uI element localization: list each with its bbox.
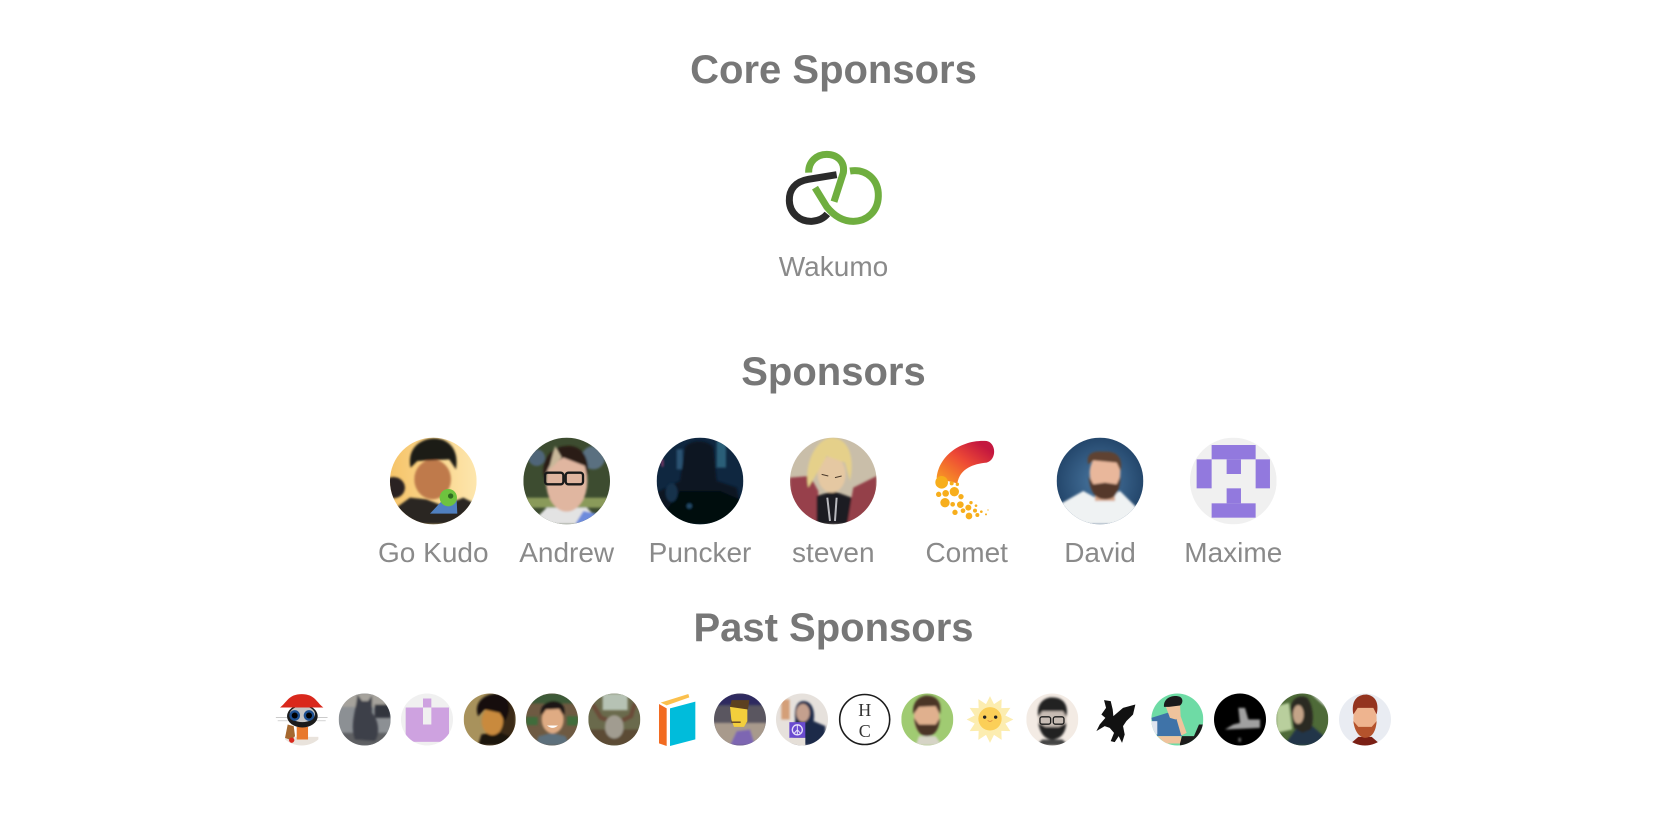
avatar: smiling man bbox=[526, 694, 578, 745]
avatar: cartoon character bbox=[714, 694, 766, 745]
avatar: steven bbox=[790, 438, 877, 524]
panel: core sponsors bbox=[690, 48, 977, 282]
avatar: HC monogram: H bbox=[858, 700, 871, 720]
label: Comet: Comet bbox=[925, 537, 1008, 568]
label: Puncker: Puncker bbox=[649, 537, 751, 568]
avatar: man with beard on green bbox=[901, 694, 953, 745]
label: steven: steven bbox=[792, 537, 875, 568]
avatar: long-haired figure bbox=[1276, 694, 1328, 745]
avatar: woman with peace sign bbox=[776, 694, 828, 745]
heading: past sponsors: Past Sponsors bbox=[693, 606, 974, 650]
avatar: pegasus bbox=[1096, 700, 1136, 743]
avatar: Go Kudo bbox=[382, 438, 477, 524]
avatar: HC monogram bbox=[840, 694, 890, 744]
avatar: cat bbox=[339, 694, 391, 746]
avatar: Maxime bbox=[1190, 438, 1277, 524]
label: David: David bbox=[1064, 537, 1136, 568]
avatar: man with laptop bbox=[1151, 694, 1203, 745]
label: Maxime: Maxime bbox=[1184, 537, 1282, 568]
label: Go Kudo: Go Kudo bbox=[378, 537, 489, 568]
avatar: pink identicon bbox=[401, 694, 453, 745]
logo: Wakumo bbox=[789, 154, 878, 221]
avatar: David bbox=[1057, 438, 1143, 524]
panel: past sponsors bbox=[276, 606, 1391, 746]
sponsors infographic bbox=[276, 55, 1391, 746]
avatar: black and white sculpture bbox=[1214, 694, 1266, 745]
avatar: portrait in warm light bbox=[464, 694, 516, 745]
icon: book bbox=[659, 694, 695, 746]
avatar: Comet bbox=[935, 441, 994, 519]
avatar: Puncker bbox=[657, 438, 743, 524]
avatar: HC monogram: C bbox=[859, 721, 871, 741]
label: Andrew: Andrew bbox=[519, 537, 615, 568]
heading: sponsors: Sponsors bbox=[741, 350, 926, 394]
avatar: sun bbox=[967, 696, 1013, 743]
avatar: Andrew bbox=[523, 438, 610, 524]
avatar: skull mascot bbox=[276, 694, 328, 745]
label: Wakumo: Wakumo bbox=[779, 251, 888, 282]
panel: sponsors bbox=[378, 350, 1282, 568]
avatar: moose bbox=[588, 694, 640, 745]
heading: core sponsors: Core Sponsors bbox=[690, 48, 977, 92]
avatar: man with glasses bbox=[1026, 694, 1078, 745]
avatar: illustrated red-haired man bbox=[1339, 694, 1391, 745]
